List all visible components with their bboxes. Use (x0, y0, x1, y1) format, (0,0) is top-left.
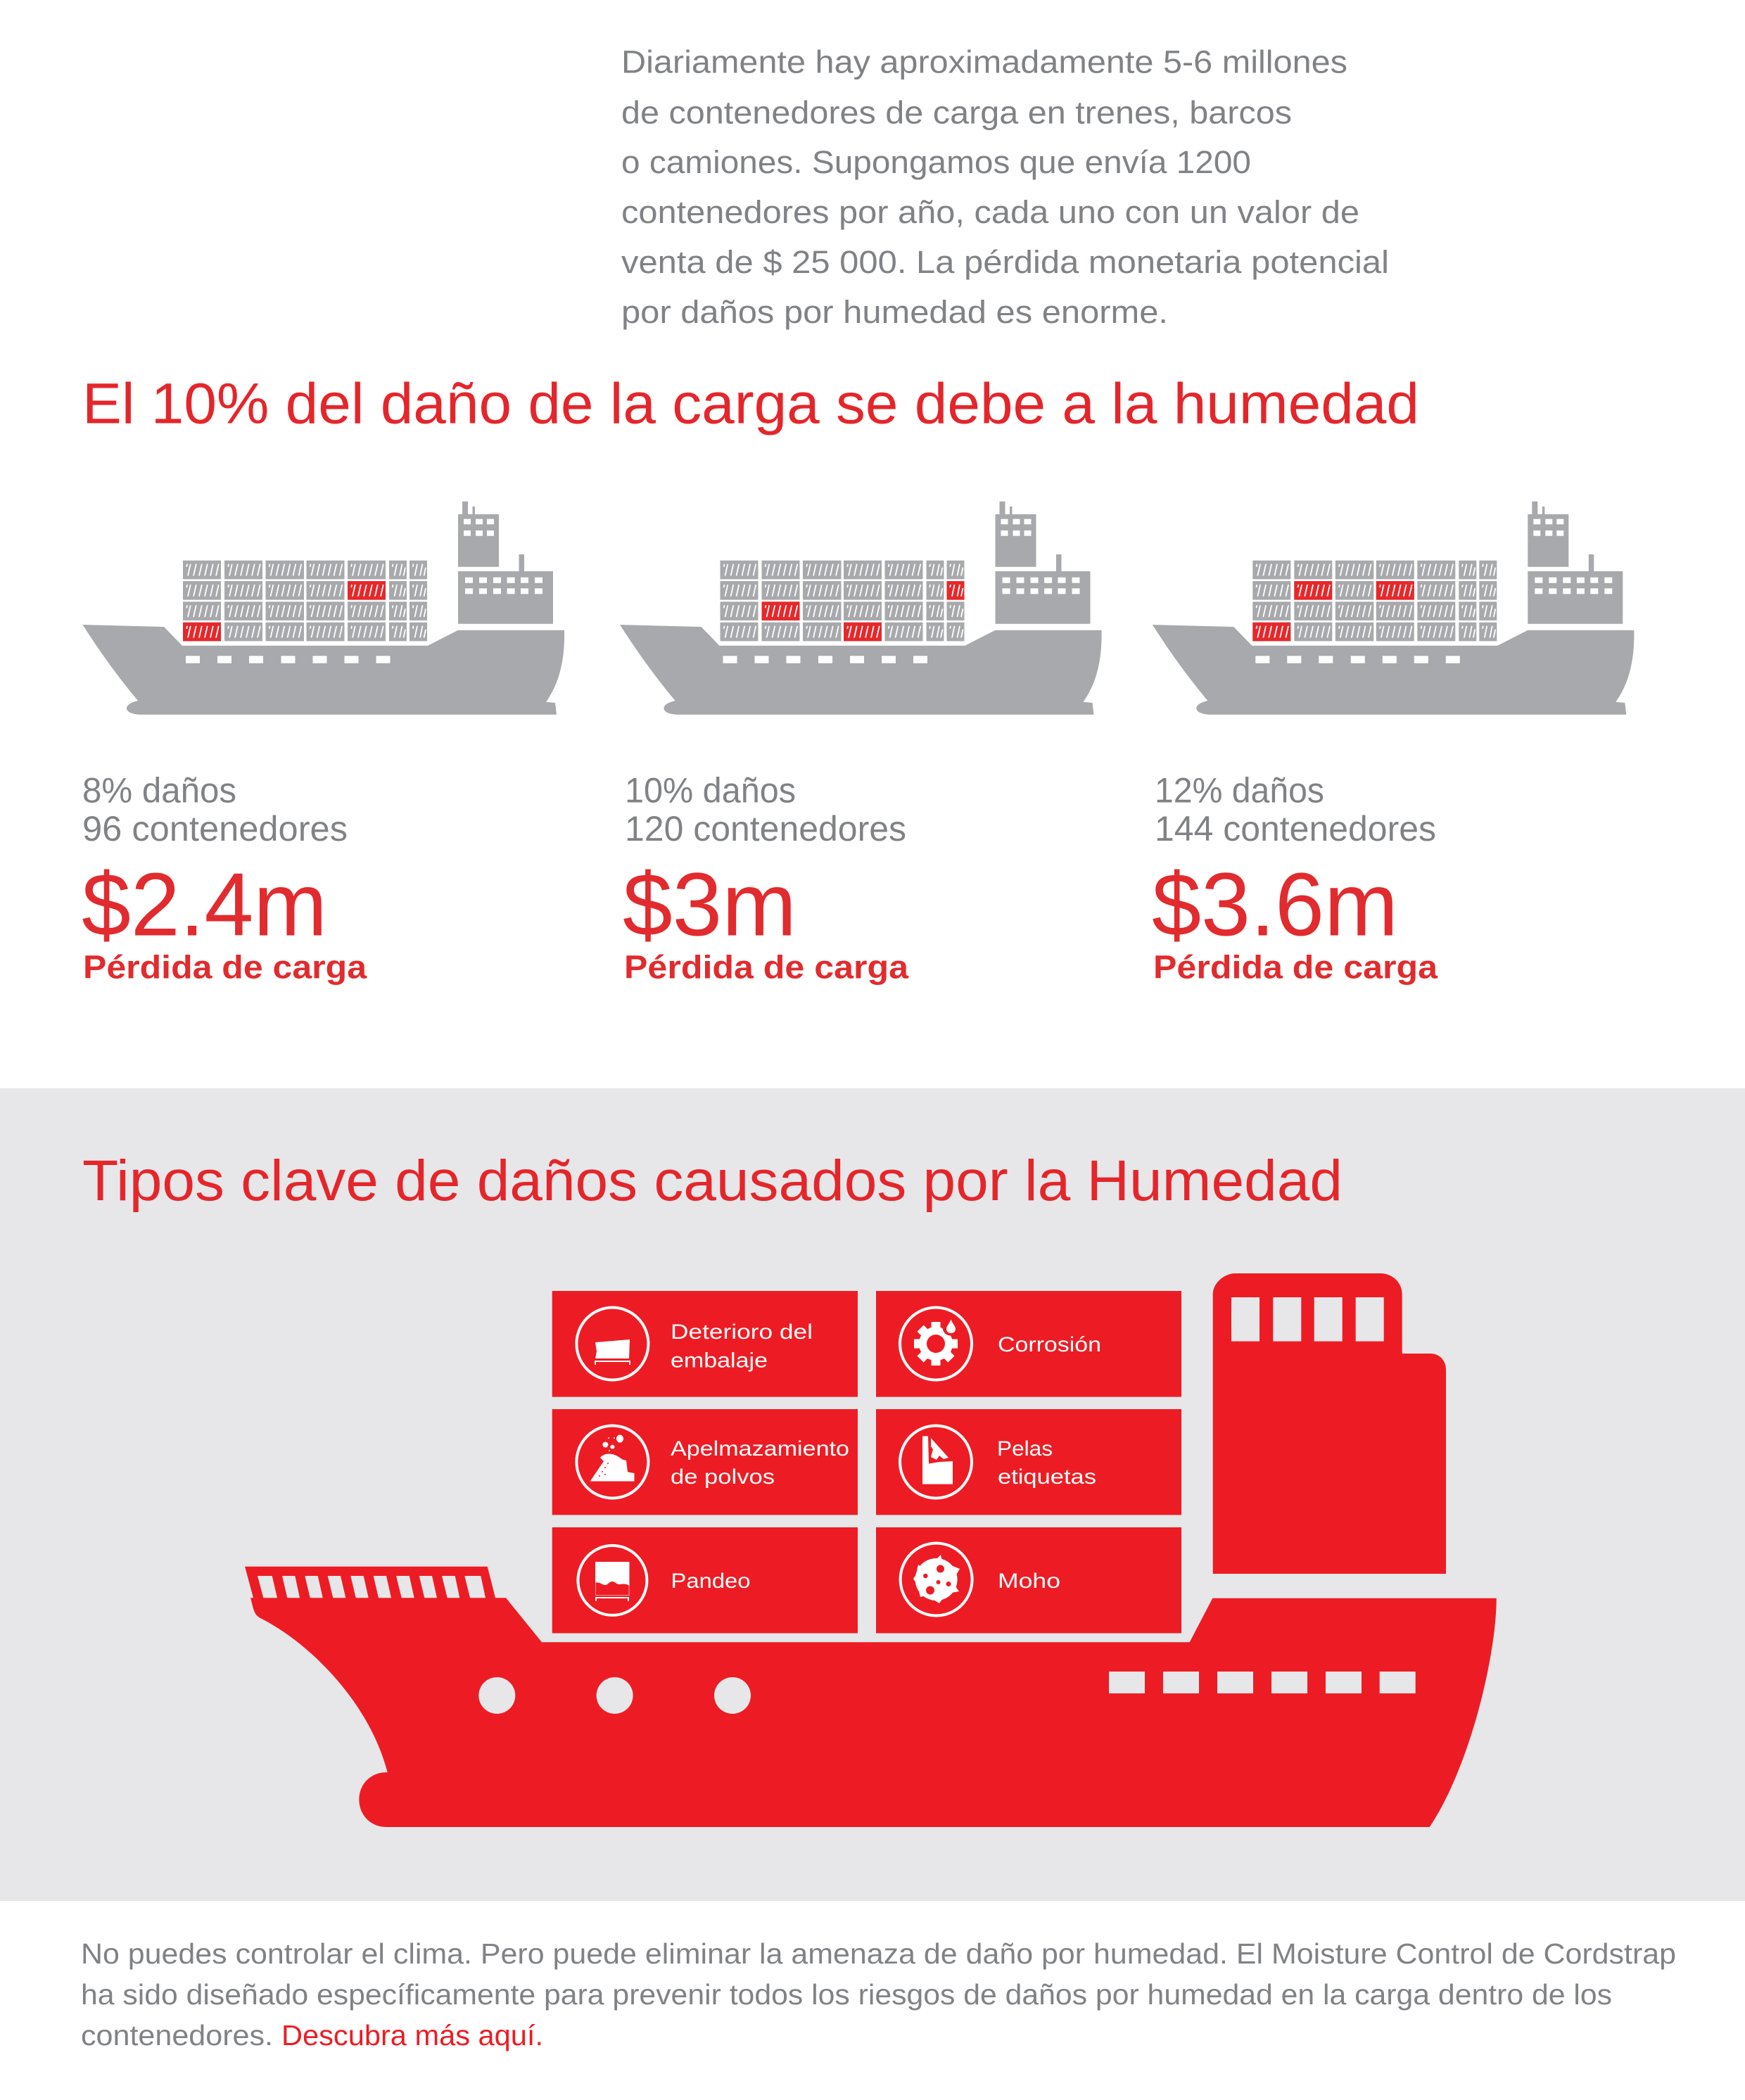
stat: 10% damage, $3m: 120 contenedores (625, 809, 906, 848)
stat: 12% damage, $3.6m: 12% daños (1155, 771, 1324, 810)
tower windows (1231, 1297, 1384, 1342)
card: warping (552, 1527, 858, 1634)
stat: 12% damage, $3.6m: $3.6m (1152, 854, 1398, 954)
card: peeling labels (876, 1409, 1181, 1515)
stat: 8% damage, $2.4m (82, 771, 367, 986)
closing paragraph: Descubra más aquí. (281, 2019, 543, 2051)
big red ship (245, 1273, 1497, 1827)
heading: key damage types: Tipos clave de daños causados por la Humedad (82, 1149, 1343, 1213)
icon: damaged box (576, 1307, 648, 1380)
card: corrosion: Corrosión (998, 1333, 1101, 1356)
card: mould (876, 1527, 1181, 1634)
stat: 8% damage, $2.4m: 96 contenedores (82, 809, 348, 848)
ship 3: 12% damaged containers (1153, 502, 1634, 715)
intro paragraph (621, 44, 1389, 330)
stat: 8% damage, $2.4m: $2.4m (82, 854, 327, 954)
intro paragraph: venta de $ 25 000. La pérdida monetaria potencial (621, 244, 1389, 280)
card: packaging deterioration: embalaje (671, 1349, 768, 1372)
intro paragraph: por daños por humedad es enorme. (621, 294, 1168, 330)
stat: 10% damage, $3m: $3m (623, 854, 797, 954)
stat: 8% damage, $2.4m: Pérdida de carga (83, 949, 367, 986)
icon: peeling label (900, 1425, 972, 1498)
heading: 10% of cargo damage: El 10% del daño de la carga se debe a la humedad (82, 371, 1419, 436)
ship 2: 10% damaged containers (620, 502, 1102, 715)
card: warping: Pandeo (671, 1570, 750, 1593)
icon: powder pile (576, 1425, 648, 1498)
closing paragraph: contenedores. (81, 2019, 273, 2051)
stat: 12% damage, $3.6m: 144 contenedores (1155, 809, 1436, 848)
closing paragraph: ha sido diseñado específicamente para prevenir todos los riesgos de daños por humedad en la carga dentro de los (81, 1978, 1612, 2011)
stat: 10% damage, $3m (623, 771, 908, 986)
ship hull (245, 1567, 1497, 1827)
card: packaging deterioration (552, 1291, 858, 1397)
icon: mould spore (901, 1544, 972, 1615)
intro paragraph: contenedores por año, cada uno con un valor de (621, 194, 1359, 230)
intro paragraph: Diariamente hay aproximadamente 5-6 millones (621, 44, 1347, 79)
hull windows (1109, 1672, 1416, 1693)
closing paragraph: No puedes controlar el clima. Pero puede eliminar la amenaza de daño por humedad. El Moisture Control de Cordstrap (81, 1937, 1676, 1970)
closing paragraph (81, 1937, 1676, 2051)
card: mould: Moho (998, 1570, 1060, 1593)
intro paragraph: o camiones. Supongamos que envía 1200 (621, 144, 1251, 180)
portholes (478, 1677, 751, 1714)
stat: 10% damage, $3m: Pérdida de carga (624, 949, 908, 986)
bridge tower (1213, 1273, 1446, 1574)
card: peeling labels: Pelas (997, 1437, 1053, 1461)
card: powder caking: Apelmazamiento (671, 1437, 849, 1461)
icon: warped box (578, 1546, 647, 1615)
stat: 12% damage, $3.6m: Pérdida de carga (1153, 949, 1438, 986)
icon: gear with drop (900, 1307, 972, 1380)
card: packaging deterioration: Deterioro del (671, 1321, 813, 1344)
card: peeling labels: etiquetas (998, 1465, 1096, 1489)
card: powder caking (552, 1409, 858, 1515)
rail openings (258, 1576, 486, 1598)
ship 1: 8% damaged containers (83, 502, 564, 715)
card: powder caking: de polvos (671, 1465, 775, 1489)
stat: 10% damage, $3m: 10% daños (625, 771, 796, 810)
stat: 8% damage, $2.4m: 8% daños (82, 771, 236, 810)
panel: key moisture damage types (0, 1088, 1745, 1901)
card: corrosion (876, 1291, 1181, 1397)
stat: 12% damage, $3.6m (1152, 771, 1438, 986)
intro paragraph: de contenedores de carga en trenes, barcos (621, 94, 1292, 131)
